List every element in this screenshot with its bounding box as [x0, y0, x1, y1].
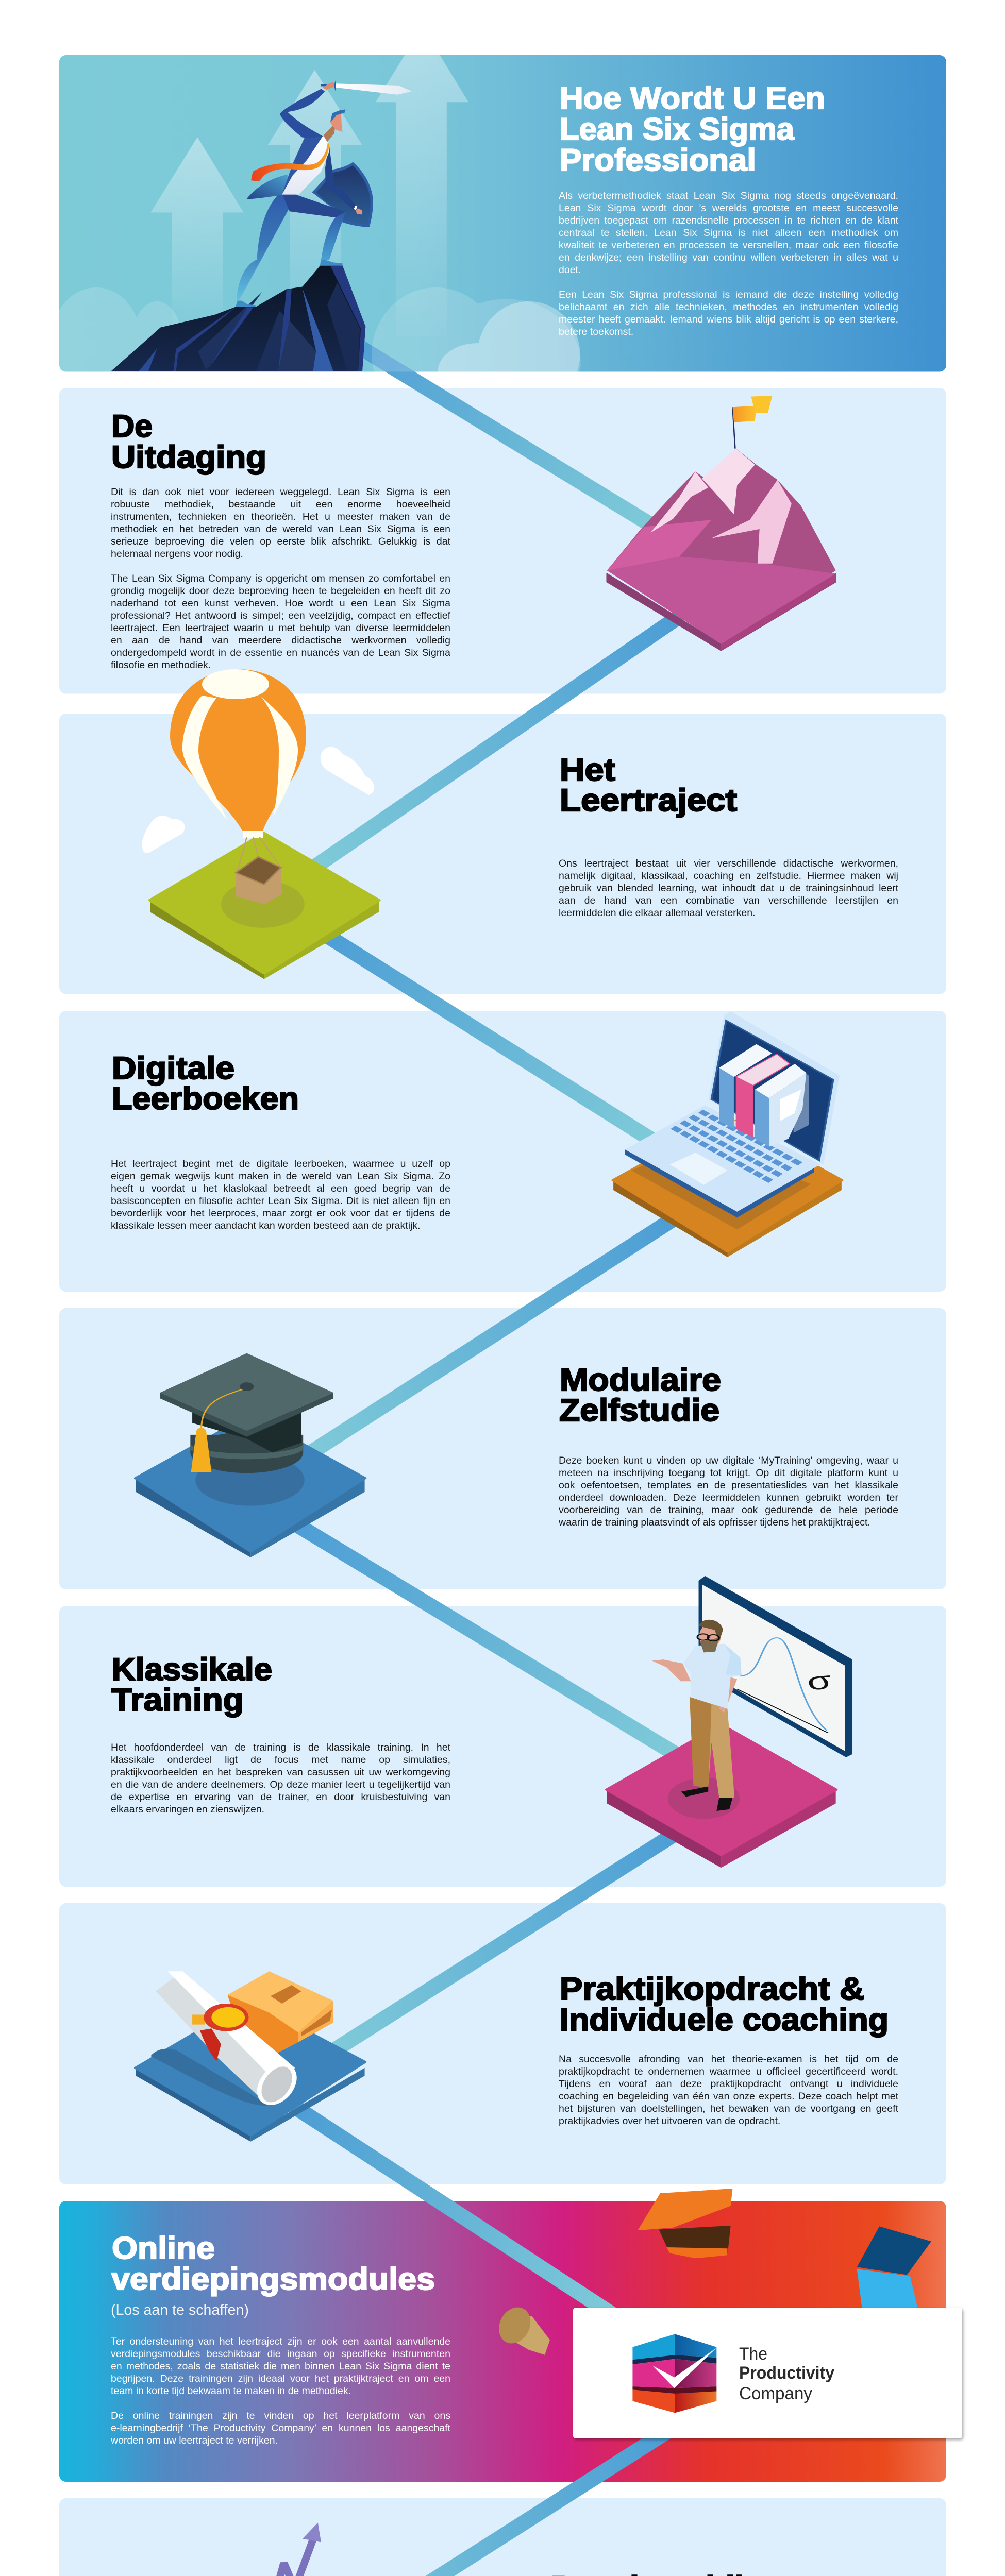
company name	[739, 2344, 834, 2403]
heading: Digitale Leerboeken	[112, 1050, 299, 1116]
heading: Digitale Leerboeken: Leerboeken	[112, 1081, 299, 1116]
illustration: growth bar chart	[150, 2522, 379, 2576]
illustration: man with sword on rock	[111, 79, 412, 371]
text: De Uitdaging: filosofie en methodiek.	[111, 659, 211, 671]
floating cap	[638, 2189, 732, 2258]
heading: Hoe Wordt U Een Lean Six Sigma Professional: Lean Six Sigma	[560, 112, 795, 146]
jacket and arms	[282, 136, 323, 195]
heading: Praktijkopdracht & Individuele coaching: Praktijkopdracht &	[560, 1971, 864, 2006]
text: De Uitdaging: en aan de hand van meerdere didactische werkvormen volledig	[111, 635, 450, 646]
text: Klassikale Training: klassikale onderdeel ligt de focus met name op simulaties,	[111, 1754, 450, 1766]
text: hero intro: centraal te stellen. Lean Six Sigma is niet alleen een methodiek om	[559, 227, 898, 239]
text: Klassikale Training: elkaars ervaringen en zienswijzen.	[111, 1804, 264, 1815]
panel: Online verdiepingsmodules	[59, 2201, 946, 2482]
text: Online verdiepingsmodules: e-learningbedrijf ‘The Productivity Company’ en kunnen los aangeschaft	[111, 2422, 450, 2434]
hero clouds in front of connector	[372, 287, 580, 372]
shield	[312, 162, 373, 227]
text: hero intro: belichaamt en zich alle technieken, methodes en instrumenten volledig	[559, 301, 898, 313]
text: Online verdiepingsmodules: De online trainingen zijn te vinden op het leerplatform van ons	[111, 2410, 450, 2421]
text: Praktijkopdracht: Na succesvolle afronding van het theorie-examen is het tijd om de	[559, 2054, 898, 2065]
text: De Uitdaging: naderhand tot een kunst verheven. Hoe wordt u een Lean Six Sigma	[111, 598, 450, 609]
text: Praktijkopdracht: praktijkadvies over het uitvoeren van de opdracht.	[559, 2115, 780, 2127]
text: De Uitdaging: instrumenten, technieken en theorieën. Het u meester maken van de	[111, 511, 450, 522]
tie	[251, 143, 329, 181]
heading: Praktijkopdracht & Individuele coaching	[560, 1971, 889, 2037]
front thigh and shin	[282, 195, 346, 221]
heading: Klassikale Training: Training	[111, 1682, 244, 1717]
panel: Praktijkopdracht	[59, 1903, 946, 2184]
heading: Hoe Wordt U Een Lean Six Sigma Professional: Hoe Wordt U Een	[560, 81, 825, 115]
text: hero intro: betere toekomst.	[559, 326, 633, 337]
text: De Uitdaging: professional? Het antwoord is simpel; een veelzijdig, compact en effectief	[111, 610, 450, 621]
heading: Modulaire Zelfstudie	[559, 1362, 721, 1428]
text: Praktijkopdracht: praktijkopdracht te ondernemen waarmee u officieel gecertificeerd wordt.	[559, 2066, 898, 2077]
text: Online verdiepingsmodules: begrijpen. Deze trainingen zijn ideaal voor het praktijktraject en om een	[111, 2373, 450, 2384]
text: Het Leertraject: leermiddelen die elkaar allemaal versterken.	[559, 907, 756, 919]
illustration: floating module items	[495, 2189, 931, 2355]
panel: De Uitdaging	[59, 388, 946, 693]
heading: Hoe Wordt U Een Lean Six Sigma Professional	[560, 81, 825, 177]
text: De Uitdaging: Dit is dan ook niet voor iedereen weggelegd. Lean Six Sigma is een	[111, 486, 450, 498]
text: Modulaire Zelfstudie: Deze boeken kunt u vinden op uw digitale ‘MyTraining’ omgeving, waar u	[559, 1455, 898, 1466]
text: Digitale Leerboeken: klassikale lessen meer aandacht kan worden besteed aan de praktijk.	[111, 1220, 421, 1231]
heading: De Uitdaging: Uitdaging	[111, 439, 266, 474]
text: Praktijkopdracht: Tijdens en vooraf aan deze praktijkopdracht ontvangt u individuele	[559, 2078, 898, 2090]
panel: Het Leertraject	[59, 714, 946, 994]
text: Het Leertraject: namelijk digitaal, klassikaal, coaching en zelfstudie. Hiermee maken wij	[559, 870, 898, 882]
rock	[111, 266, 365, 371]
text: De Uitdaging	[111, 486, 450, 671]
logo	[632, 2334, 716, 2413]
text: Digitale Leerboeken: basisconcepten en filosofie achter Lean Six Sigma. Dit is niet alleen fijn en	[111, 1195, 450, 1207]
text: hero intro: Lean Six Sigma wordt door ’s werelds grootste en meest succesvolle	[559, 202, 898, 214]
text: Het Leertraject: gebruik van blended learning, wat inhoudt dat u de trainingsinhoud leert	[559, 883, 898, 894]
text: Het Leertraject	[559, 858, 898, 919]
illustration: mountain with flag	[607, 396, 836, 651]
illustration: trainer at whiteboard: σ	[804, 1666, 834, 1696]
text: De Uitdaging: ondergedompeld wordt in de essentie en nuancés van de Lean Six Sigma	[111, 647, 450, 658]
text: De Uitdaging: serieuze beproeving die velen op eerste blik afschrikt. Gelukkig is dat	[111, 536, 450, 547]
panel: Digitale Leerboeken	[59, 1011, 946, 1292]
heading: Hoe Wordt U Een Lean Six Sigma Professional: Professional	[560, 143, 756, 177]
company name: The	[739, 2344, 767, 2364]
heading: Het Leertraject	[560, 752, 737, 818]
text: Digitale Leerboeken: bevorderlijk voor het leerproces, maar zorgt er ook voor dat er tijdens de	[111, 1208, 450, 1219]
panel: Modulaire Zelfstudie	[59, 1308, 946, 1589]
shirt	[282, 136, 329, 195]
heading: Praktijkopdracht & Individuele coaching: Individuele coaching	[560, 2002, 889, 2037]
text: Online verdiepingsmodules: en methodes, zoals de statistiek die men binnen Lean Six Sigma dient te	[111, 2361, 450, 2372]
card: The Productivity Company	[573, 2308, 962, 2438]
platform	[150, 833, 379, 979]
text: Klassikale Training: de expertise en ervaring van de trainer, en door kruisbestuiving van	[111, 1791, 450, 1803]
heading: Het Leertraject: Leertraject	[560, 783, 737, 818]
text: Klassikale Training: Het hoofdonderdeel van de training is de klassikale training. In het	[111, 1742, 450, 1753]
text: De Uitdaging: grondig mogelijk door deze beproeving heen te begeleiden en heeft dit zo	[111, 585, 450, 597]
text: hero intro: Een Lean Six Sigma professional is iemand die deze instelling volledig	[559, 289, 898, 300]
text: hero intro: Als verbetermethodiek staat Lean Six Sigma nog steeds ongeëvenaard.	[559, 190, 898, 201]
text: Online verdiepingsmodules: team in korte tijd bekwaam te maken in de methodiek.	[111, 2385, 351, 2397]
text: Online verdiepingsmodules	[111, 2336, 450, 2446]
text: Praktijkopdracht: het bijsturen van doelstellingen, het bewaken van de voortgang en geeft	[559, 2103, 898, 2114]
text: Modulaire Zelfstudie: voorbereiding van de training, maar ook gedurende de hele periode	[559, 1504, 898, 1516]
hero backdrop: arrows and clouds	[39, 27, 468, 393]
heading: Online verdiepingsmodules: Online	[112, 2231, 215, 2265]
heading: Modulaire Zelfstudie: Modulaire	[560, 1362, 721, 1397]
back leg	[237, 195, 297, 301]
heading: Digitale Leerboeken: Digitale	[112, 1050, 234, 1086]
heading: De Uitdaging	[111, 409, 266, 474]
text: De Uitdaging: helemaal nergens voor nodig.	[111, 548, 243, 560]
suit tail	[246, 175, 288, 199]
text: Klassikale Training	[111, 1742, 450, 1815]
company name: Company	[739, 2384, 812, 2403]
sword	[336, 83, 412, 95]
text: Modulaire Zelfstudie: onderdeel downloaden. Deze leermiddelen kunnen gebruikt worden ter	[559, 1492, 898, 1503]
text: De Uitdaging: robuuste methodiek, bestaande uit een enorme hoeveelheid	[111, 499, 450, 510]
text: hero intro: kwaliteit te verbeteren en processen te versnellen, maar ook een filosofie	[559, 240, 898, 251]
text: Modulaire Zelfstudie	[559, 1455, 898, 1528]
text: Praktijkopdracht: coaching en begeleiding van één van onze experts. Deze coach helpt met	[559, 2091, 898, 2102]
text: De Uitdaging: The Lean Six Sigma Company is opgericht om mensen zo comfortabel en	[111, 573, 450, 584]
text: Modulaire Zelfstudie: meteen na inschrijving toegang tot krijgt. Op dit digitale platform kunt u	[559, 1467, 898, 1479]
text: Klassikale Training: praktijkvoorbeelden en het bespreken van casussen uit uw werkomgeving	[111, 1767, 450, 1778]
panel: Klassikale Training	[59, 1606, 946, 1887]
text: Online verdiepingsmodules: Ter ondersteuning van het leertraject zijn er ook een aantal aanvullende	[111, 2336, 450, 2347]
floating cork roll	[495, 2306, 550, 2355]
text: Klassikale Training: en die van de andere deelnemers. Op deze manier leert u tegelijkertijd van	[111, 1779, 450, 1790]
text: De Uitdaging: methodiek en het betreden van de wereld van Lean Six Sigma is een	[111, 523, 450, 535]
company name: Productivity	[739, 2363, 834, 2383]
text: hero intro: meester heeft gemaakt. Iemand wiens blik altijd gericht is op een sterkere,	[559, 314, 898, 325]
heading: Klassikale Training	[111, 1652, 272, 1717]
heading: Online verdiepingsmodules	[111, 2231, 435, 2296]
illustration: trainer at whiteboard	[607, 1576, 852, 1868]
panel: intro hero	[59, 55, 946, 372]
subheading: los aan te schaffen: (Los aan te schaffen)	[111, 2302, 249, 2318]
floating laptop	[857, 2226, 931, 2309]
balloon envelope	[170, 669, 306, 831]
illustration: diploma and book	[136, 1971, 365, 2142]
text: Het Leertraject: Ons leertraject bestaat uit vier verschillende didactische werkvormen,	[559, 858, 898, 869]
illustration: balloon on green platform	[142, 669, 379, 979]
text: Digitale Leerboeken: Het leertraject begint met de digitale leerboeken, waarmee u uzelf op	[111, 1158, 450, 1170]
text: Het Leertraject: aan de hand van een combinatie van verschillende leerstijlen en	[559, 895, 898, 906]
illustration: graduation cap	[136, 1353, 365, 1557]
connector lines	[289, 345, 680, 2576]
text: De Uitdaging: leertraject. Een leertraject waarin u met behulp van diverse leermiddelen	[111, 622, 450, 634]
text: Modulaire Zelfstudie: waarin de training plaatsvindt of als opfrisser tijdens het praktijktraject.	[559, 1517, 870, 1528]
raised arm	[280, 89, 325, 138]
heading: De Uitdaging: De	[111, 409, 153, 444]
text: Modulaire Zelfstudie: ook oefentoetsen, templates en de presentatieslides van het klassikale	[559, 1480, 898, 1491]
panel: Resultaat bij eigen bedrijf	[59, 2498, 946, 2576]
text: Online verdiepingsmodules: verdiepingsmodules beschikbaar die ingaan op specifieke instrumenten	[111, 2348, 450, 2360]
heading: Het Leertraject: Het	[560, 752, 615, 787]
heading: Klassikale Training: Klassikale	[112, 1652, 272, 1687]
illustration: laptop with books	[613, 1011, 842, 1257]
text: hero intro: bedrijven toegepast om razendsnelle processen in te richten en de klant	[559, 215, 898, 226]
text: hero intro: doet.	[559, 264, 581, 276]
text: Praktijkopdracht	[559, 2054, 898, 2127]
clouds	[321, 747, 374, 795]
text: Digitale Leerboeken	[111, 1158, 450, 1231]
heading: Online verdiepingsmodules: verdiepingsmodules	[111, 2262, 435, 2296]
text: Digitale Leerboeken: heeft u voordat u het klaslokaal betreedt al een goed begrip van de	[111, 1183, 450, 1194]
head	[324, 123, 336, 142]
text: hero intro: en denkwijze; een instelling van continu willen verbeteren in alles wat u	[559, 252, 898, 263]
heading: Modulaire Zelfstudie: Zelfstudie	[559, 1393, 719, 1428]
text: hero intro	[559, 190, 898, 337]
text: Online verdiepingsmodules: worden om uw leertraject te verrijken.	[111, 2435, 278, 2446]
text: Digitale Leerboeken: eigen gemak wegwijs kunt maken in de wereld van Lean Six Sigma. Zo	[111, 1171, 450, 1182]
